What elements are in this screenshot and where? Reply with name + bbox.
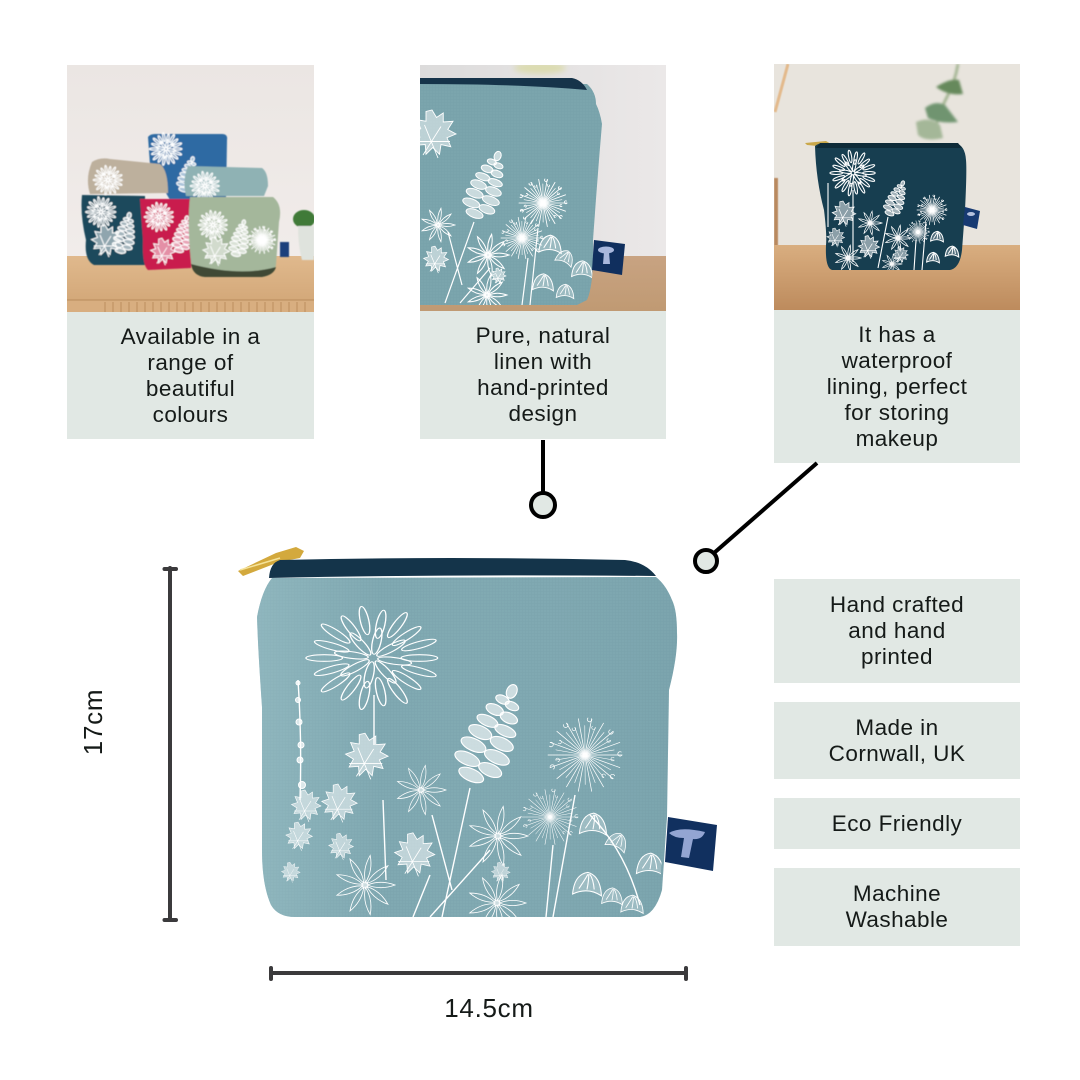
wall background [774, 64, 1020, 246]
blurred flower top [514, 62, 566, 74]
callout connector: linen [529, 440, 557, 519]
height dimension bar [162, 566, 178, 922]
plant pot [293, 210, 315, 260]
photo: navy pouch on wooden table with plant [774, 64, 1020, 310]
fabric tag [963, 207, 980, 229]
wall background [67, 65, 314, 257]
feature: machine washable [774, 868, 1020, 946]
caption: colours [67, 312, 314, 439]
caption: linen: hand-printed [477, 375, 609, 400]
feature: eco friendly [774, 798, 1020, 849]
caption: colours: colours [153, 402, 228, 426]
caption: waterproof lining: for storing [844, 400, 949, 424]
fabric tag [665, 817, 717, 871]
caption: colours: Available in a [121, 324, 260, 348]
sage pouch [189, 197, 280, 277]
stems [298, 680, 640, 917]
feature: hand crafted: Hand crafted [830, 592, 964, 617]
feature: made in Cornwall [774, 702, 1020, 779]
feature: made in Cornwall: Cornwall, UK [829, 740, 965, 766]
blue pouch [148, 133, 227, 200]
tag [280, 242, 289, 257]
caption: waterproof lining: makeup [856, 426, 938, 450]
caption: colours: beautiful [146, 376, 235, 400]
caption: colours: range of [147, 350, 234, 374]
printed flowers [412, 110, 592, 315]
fabric tag [592, 240, 625, 275]
photo: range of colourful pouches on a wooden shelf [67, 65, 314, 312]
pouch body [257, 577, 677, 917]
pale blue pouch [184, 166, 268, 201]
star flowers [397, 765, 446, 815]
feature: machine washable: Machine [853, 881, 941, 906]
zipper tape [269, 558, 656, 578]
caption: linen: Pure, natural [476, 323, 610, 348]
feature: hand crafted [774, 579, 1020, 683]
beige pouch [88, 158, 168, 195]
clover flowers [548, 718, 622, 791]
height label: 17cm [78, 689, 108, 755]
blurred stick [775, 64, 788, 112]
caption: waterproof lining: waterproof [842, 348, 952, 372]
wall background [420, 65, 666, 257]
wooden shelf [67, 256, 314, 312]
printed flowers [827, 150, 959, 274]
width dimension bar [269, 966, 688, 981]
caption: waterproof lining: lining, perfect [827, 374, 967, 398]
small lupin [395, 833, 435, 876]
caption: linen: design [508, 401, 578, 426]
lupin [454, 684, 520, 784]
feature: hand crafted: and hand [848, 618, 946, 643]
caption: linen [420, 311, 666, 439]
gold zip pull [238, 547, 304, 576]
printed botanical design [281, 606, 664, 932]
ragged leaves [346, 733, 388, 779]
caption: waterproof lining [774, 310, 1020, 463]
callout connector: waterproof lining [693, 462, 818, 574]
bell flowers [579, 813, 607, 835]
gold zip pull [805, 141, 831, 147]
navy pouch [815, 143, 966, 270]
shelf post [774, 178, 778, 246]
red pouch [140, 199, 196, 270]
feature: made in Cornwall: Made in [855, 714, 939, 740]
photo: close up of linen with hand-printed design [420, 65, 666, 311]
table [774, 245, 1020, 310]
caption: linen: linen with [494, 349, 592, 374]
feature: hand crafted: printed [861, 644, 933, 669]
width label: 14.5cm [444, 993, 534, 1023]
navy pouch [82, 195, 146, 265]
table [420, 256, 666, 311]
main product: teal linen pouch [238, 547, 717, 917]
pouch body [420, 78, 602, 305]
caption: waterproof lining: It has a [858, 322, 936, 346]
pouches group [82, 133, 315, 277]
hanging plant [916, 64, 963, 139]
feature: machine washable: Washable [846, 907, 948, 932]
lavender stalk [296, 681, 306, 788]
large allium [306, 606, 438, 710]
feature: eco friendly: Eco Friendly [832, 810, 962, 836]
